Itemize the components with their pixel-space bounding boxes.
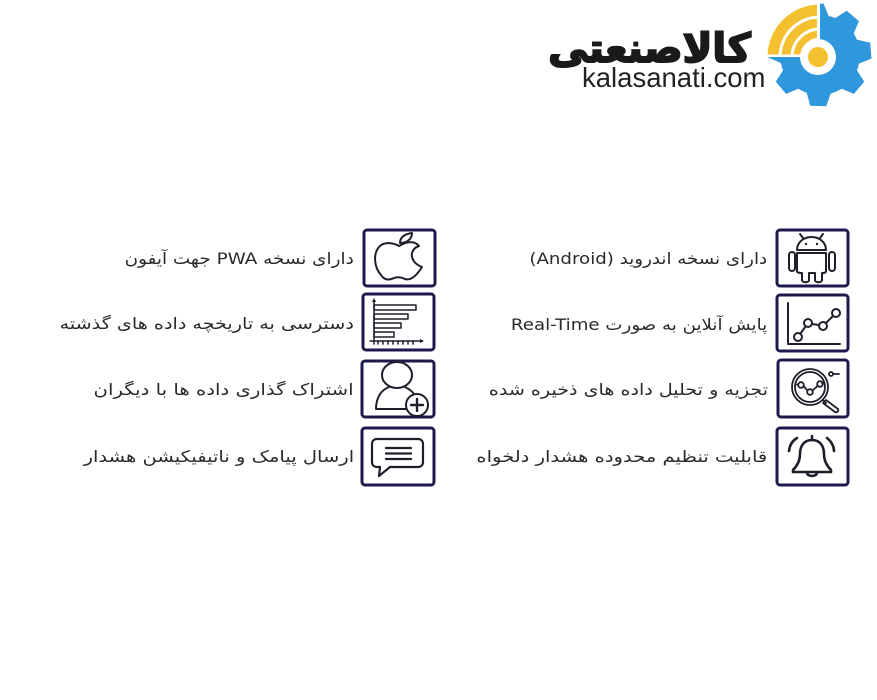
logo wordmark: domain: kalasanati.com [582, 62, 765, 93]
feature: custom alert range [476, 426, 850, 486]
icon: user with plus [360, 360, 436, 418]
feature: share data with others [94, 360, 436, 418]
icon: chat bubble [360, 426, 436, 486]
feature: real-time monitoring [511, 294, 850, 352]
feature text: تجزیه و تحلیل داده های ذخیره شده [489, 380, 768, 399]
icon: line chart [776, 294, 850, 352]
icon: horizontal bar chart [362, 292, 436, 352]
feature text: قابلیت تنظیم محدوده هشدار دلخواه [476, 447, 767, 466]
feature text: ارسال پیامک و ناتیفیکیشن هشدار [83, 447, 354, 466]
icon: gear with wifi signal [768, 4, 872, 106]
logo [548, 4, 872, 106]
feature: SMS and notification alerts [82, 426, 436, 486]
feature: analysis of stored data [489, 358, 850, 418]
icon: bell [776, 426, 850, 486]
feature: Android version [529, 228, 850, 288]
icon: android [776, 228, 850, 288]
icon: apple [362, 228, 436, 288]
feature text: اشتراک گذاری داده ها با دیگران [94, 380, 354, 399]
feature: history of past data [60, 292, 436, 352]
feature text: دارای نسخه اندروید (Android) [529, 249, 767, 268]
feature text: دارای نسخه PWA جهت آیفون [125, 249, 354, 268]
feature text: پایش آنلاین به صورت Real-Time [511, 315, 767, 334]
feature text: دسترسی به تاریخچه داده های گذشته [60, 314, 354, 333]
logo wordmark: Persian name: کالاصنعتی [548, 26, 751, 72]
icon: magnifier with chart [776, 358, 850, 418]
feature: PWA version for iPhone [125, 228, 436, 288]
